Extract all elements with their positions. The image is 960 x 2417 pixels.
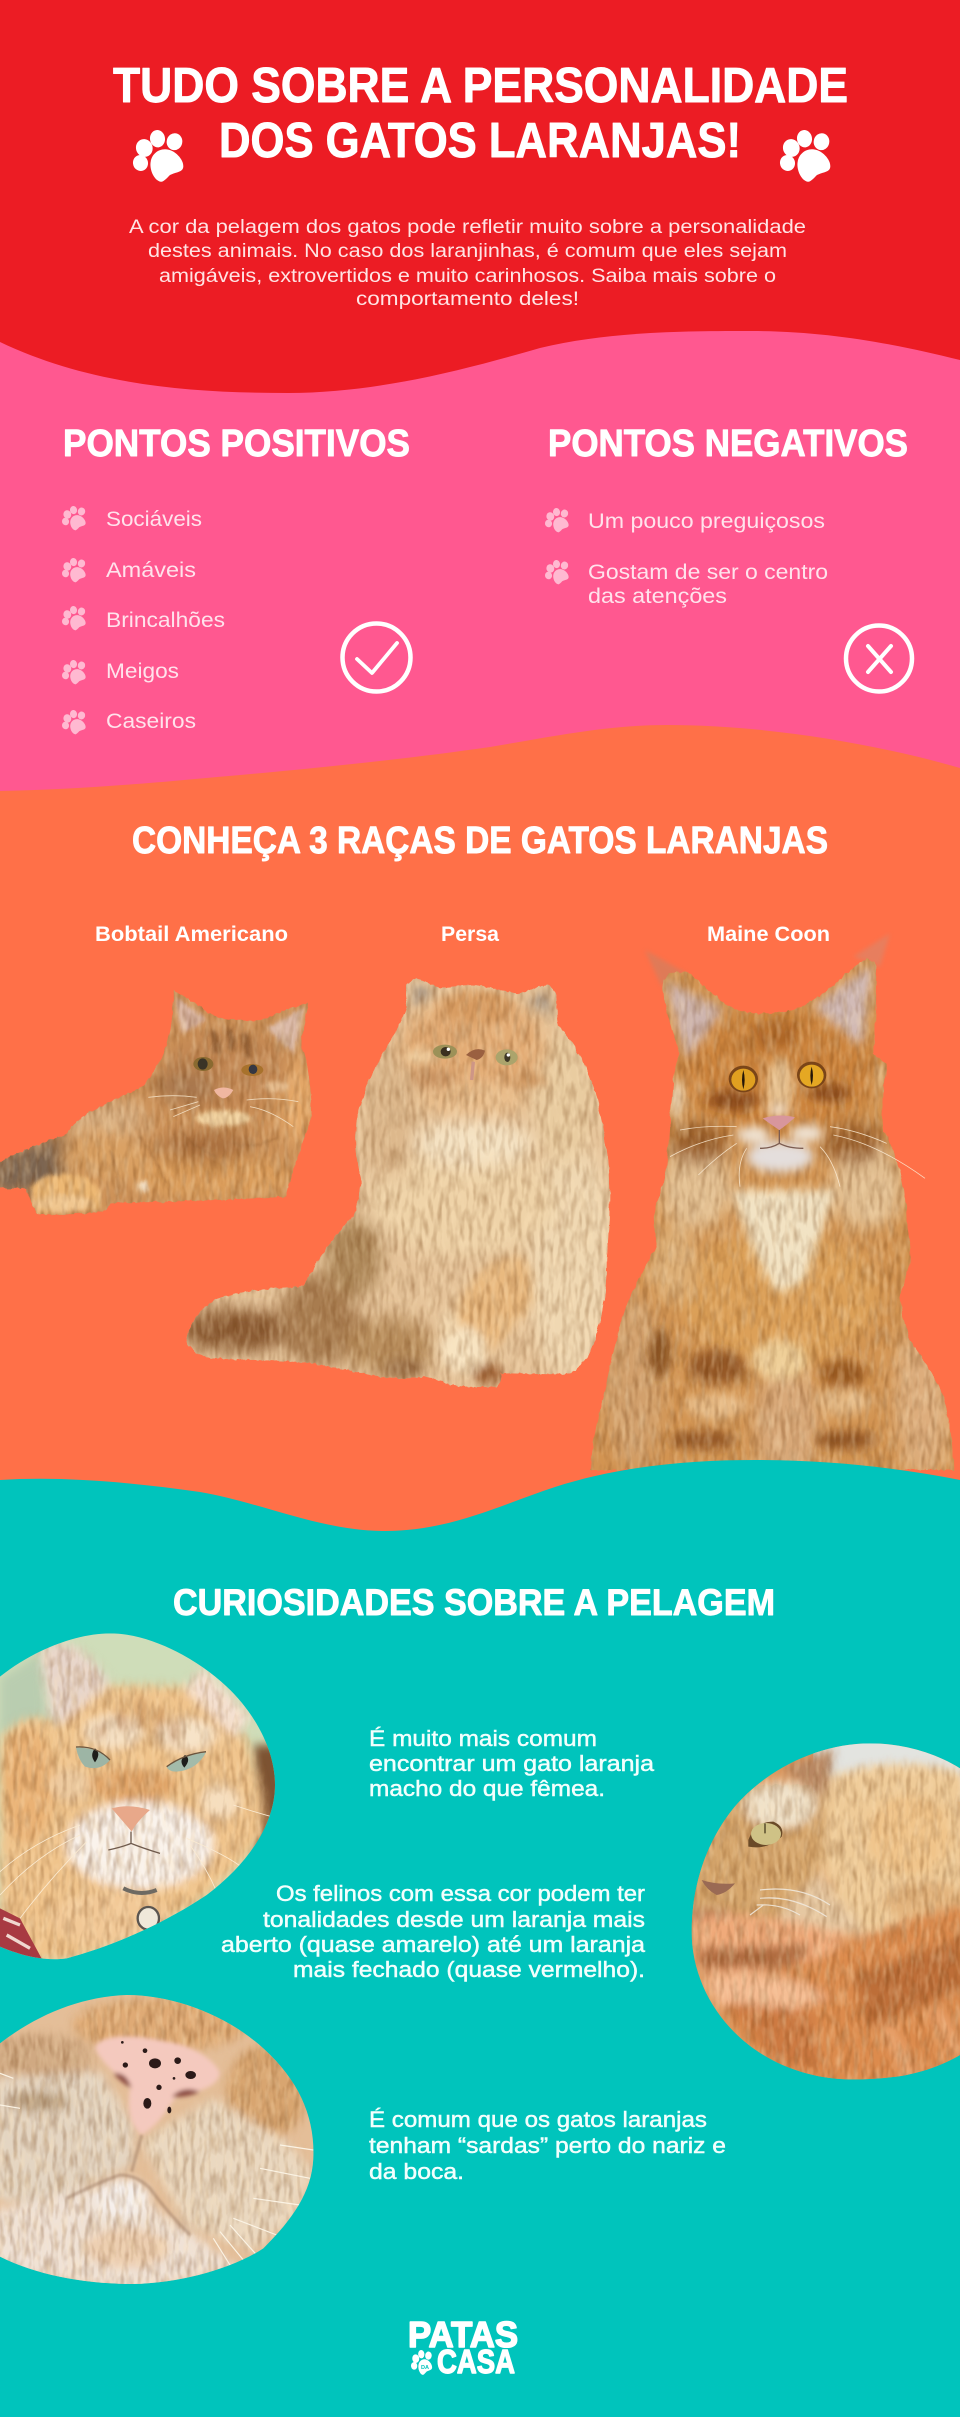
illustration: bobtail cat: [0, 983, 320, 1223]
title: [113, 59, 848, 168]
title: DOS GATOS LARANJAS!: [219, 114, 741, 168]
icon: check mark in circle: [342, 624, 410, 692]
icon: white paw right: [778, 129, 831, 182]
logo: patas da casa: [408, 2314, 518, 2380]
eyes: [193, 1057, 263, 1076]
heading: conheça 3 raças: CONHEÇA 3 RAÇAS DE GATOS LARANJAS: [132, 820, 828, 862]
photo: orange cat face: [0, 1633, 275, 1960]
photo: cat curled with tail: [680, 1735, 960, 2090]
eyes: [433, 1045, 518, 1065]
item: sociáveis: Sociáveis: [106, 508, 202, 531]
logo: patas da casa: DA: [421, 2365, 429, 2371]
text: tonalidades: mais fechado (quase vermelho).: [293, 1957, 645, 1982]
illustration: maine coon cat: [590, 933, 960, 1480]
panel: orange breeds background: [0, 725, 960, 1540]
title: TUDO SOBRE A PERSONALIDADE: [113, 59, 848, 113]
logo: patas da casa: CASA: [437, 2343, 515, 2380]
item: um pouco preguiçosos: Um pouco preguiçosos: [588, 510, 825, 533]
eyes: [76, 1747, 206, 1772]
eye: [748, 1822, 782, 1847]
intro paragraph: comportamento deles!: [356, 289, 579, 310]
nose: [95, 2036, 220, 2135]
text: tonalidades: [221, 1881, 646, 1982]
text: macho vs fêmea: encontrar um gato laranja: [369, 1751, 655, 1776]
intro paragraph: amigáveis, extrovertidos e muito carinhosos. Saiba mais sobre o: [159, 266, 776, 287]
item: brincalhões: Brincalhões: [106, 609, 225, 632]
list: negative traits: [544, 508, 828, 608]
icon: cross in circle: [846, 626, 912, 692]
list: positive traits: [61, 506, 225, 734]
item: amáveis: Amáveis: [106, 559, 196, 582]
text: tonalidades: aberto (quase amarelo) até um laranja: [221, 1932, 646, 1957]
heading: pontos negativos: PONTOS NEGATIVOS: [548, 423, 908, 465]
item: caseiros: Caseiros: [106, 710, 196, 733]
item: meigos: Meigos: [106, 660, 179, 683]
label: bobtail americano: Bobtail Americano: [95, 923, 288, 946]
panel: teal curiosities background: [0, 1460, 960, 2417]
text: tonalidades: tonalidades desde um laranja mais: [263, 1907, 645, 1932]
item: centro das atenções: [544, 560, 828, 608]
panel: pink positives and negatives background: [0, 331, 960, 800]
text: tonalidades: Os felinos com essa cor podem ter: [276, 1881, 645, 1906]
item: centro das atenções: das atenções: [588, 585, 727, 608]
item: brincalhões: [61, 606, 225, 632]
item: amáveis: [61, 558, 196, 582]
intro paragraph: destes animais. No caso dos laranjinhas, é comum que eles sejam: [148, 241, 787, 262]
item: um pouco preguiçosos: [544, 508, 825, 533]
item: caseiros: [61, 710, 196, 734]
text: macho vs fêmea: [369, 1726, 655, 1801]
item: centro das atenções: Gostam de ser o centro: [588, 561, 828, 584]
text: sardas: [369, 2107, 726, 2184]
text: macho vs fêmea: É muito mais comum: [369, 1726, 597, 1751]
label: persa: Persa: [441, 923, 499, 946]
logo: patas da casa: PATAS: [408, 2314, 518, 2355]
item: meigos: [61, 660, 179, 684]
icon: white paw left: [131, 129, 184, 182]
text: macho vs fêmea: macho do que fêmea.: [369, 1776, 605, 1801]
heading: curiosidades sobre a pelagem: CURIOSIDADES SOBRE A PELAGEM: [173, 1582, 775, 1623]
label: maine coon: Maine Coon: [707, 923, 830, 946]
intro paragraph: [129, 217, 806, 310]
eyes: [729, 1062, 826, 1092]
muzzle: [737, 1104, 823, 1172]
heading: pontos positivos: PONTOS POSITIVOS: [63, 423, 410, 465]
illustration: persian cat: [180, 973, 620, 1393]
text: sardas: da boca.: [369, 2159, 464, 2184]
collar: [122, 1886, 160, 1930]
panel: red header background: [0, 0, 960, 400]
text: sardas: tenham “sardas” perto do nariz e: [369, 2133, 726, 2158]
photo: cat nose with freckles: [0, 1995, 314, 2284]
intro paragraph: A cor da pelagem dos gatos pode refletir muito sobre a personalidade: [129, 217, 806, 238]
text: sardas: É comum que os gatos laranjas: [369, 2107, 707, 2132]
item: sociáveis: [61, 506, 202, 531]
